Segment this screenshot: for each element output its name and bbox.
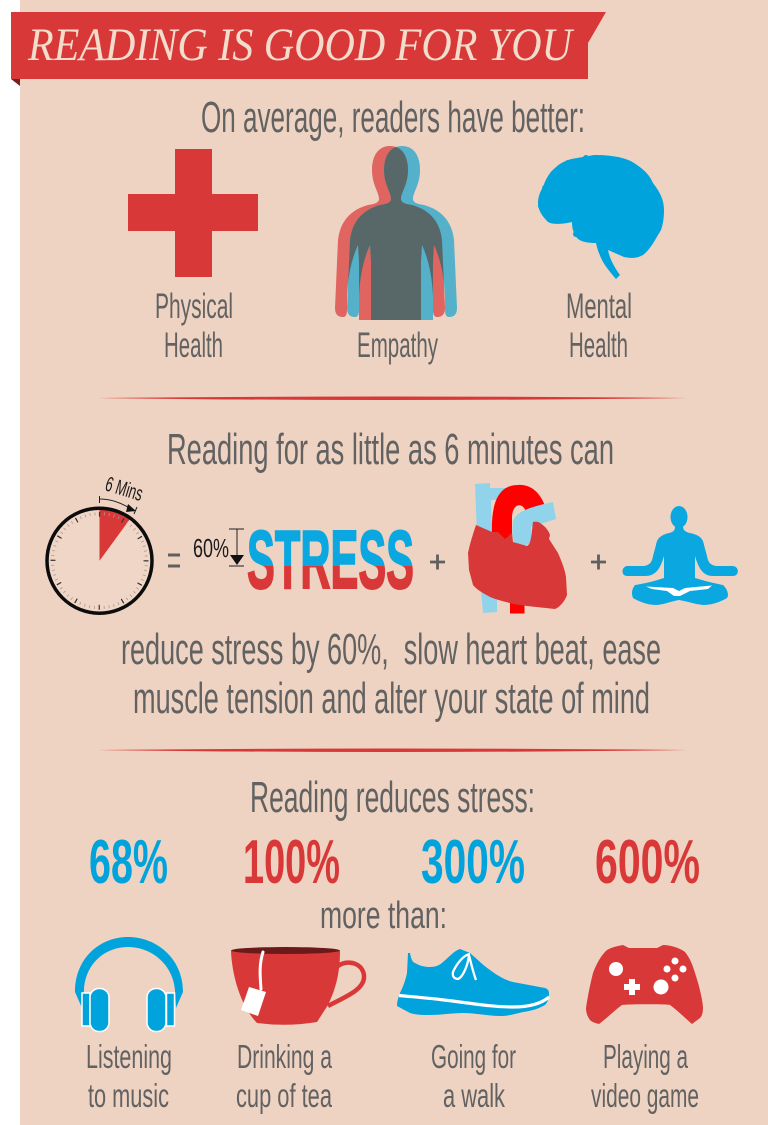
- label: mental health: [566, 287, 632, 365]
- icon: heart: [468, 483, 567, 614]
- equals sign: [168, 555, 180, 566]
- label: playing a video game: [591, 1038, 699, 1114]
- icon: sneaker: [397, 949, 549, 1016]
- icon: meditating reader: [622, 506, 738, 605]
- label: drinking a cup of tea: [236, 1038, 332, 1114]
- text: more than: more than:: [320, 895, 447, 937]
- icon: empathy person: [335, 146, 457, 320]
- plus sign: [591, 554, 606, 570]
- stat: 600 percent: 600%: [595, 828, 700, 897]
- label: playing a video game: Playing a: [603, 1038, 688, 1075]
- label: mental health: Mental: [566, 287, 632, 326]
- icon: headphones: [75, 937, 183, 1032]
- label: 60 percent: 60%: [193, 533, 229, 563]
- stat: 100 percent: 100%: [243, 828, 340, 897]
- label: listening to music: Listening: [86, 1038, 172, 1075]
- arrow: 60 percent range: [229, 529, 244, 566]
- plus sign: [430, 554, 445, 570]
- label: physical health: [155, 287, 233, 365]
- label: listening to music: to music: [88, 1077, 169, 1114]
- label: empathy: Empathy: [357, 326, 438, 365]
- word: stress: STRESS: [247, 513, 414, 606]
- label: going for a walk: a walk: [443, 1077, 505, 1114]
- stat: 300 percent: 300%: [421, 828, 525, 897]
- heading: reading reduces stress: Reading reduces stress:: [250, 773, 535, 822]
- icon: red cross: [128, 149, 258, 277]
- icon: tea cup: [231, 947, 364, 1025]
- label: mental health: Health: [569, 326, 628, 365]
- icon: game controller: [586, 945, 703, 1024]
- label: 6 mins: 6 Mins: [103, 473, 146, 506]
- label: physical health: Health: [164, 326, 223, 365]
- label: drinking a cup of tea: cup of tea: [236, 1077, 332, 1114]
- icon: stopwatch: [47, 473, 152, 613]
- label: drinking a cup of tea: Drinking a: [237, 1038, 332, 1075]
- title ribbon: READING IS GOOD FOR YOU: [27, 19, 575, 71]
- stat: 68 percent: 68%: [89, 828, 168, 897]
- label: physical health: Physical: [155, 287, 233, 326]
- title ribbon: [11, 12, 606, 86]
- label: going for a walk: [431, 1038, 516, 1114]
- label: playing a video game: video game: [591, 1077, 699, 1114]
- label: going for a walk: Going for: [431, 1038, 516, 1075]
- label: listening to music: [86, 1038, 172, 1114]
- body text: reduce stress: [121, 625, 661, 723]
- icon: brain: [538, 155, 664, 279]
